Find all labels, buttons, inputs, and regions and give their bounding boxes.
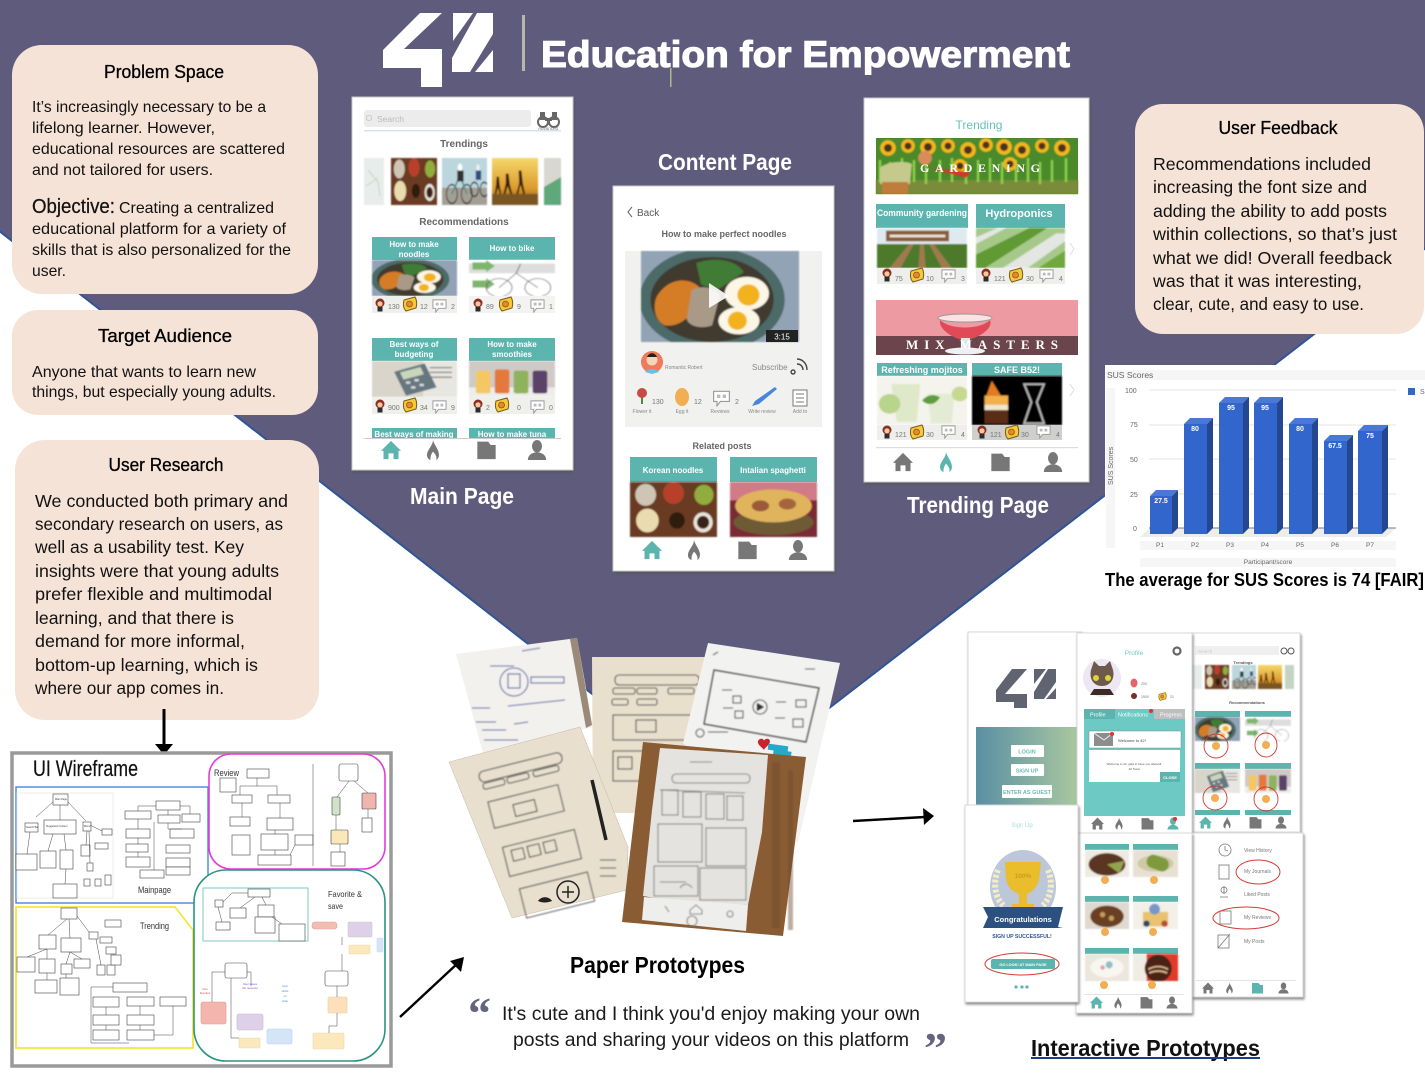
card: how to bike: How to bike [490, 244, 535, 253]
screen: sign up success [965, 805, 1078, 1002]
text: research findings: insights were that young adults [35, 561, 279, 581]
card: best ways of budgeting: budgeting [395, 350, 433, 359]
x axis labels: P1 [1156, 542, 1164, 549]
section: favorite and save: clicks [282, 989, 289, 993]
section: favorite and save: favorites [200, 991, 211, 995]
card: how to make smoothies: 2 [486, 405, 490, 412]
heading: related posts: Related posts [692, 441, 752, 451]
screen: landing: SIGN UP [1016, 768, 1039, 774]
bar values: 75 [1366, 433, 1374, 440]
screen: journals menu: My Journals [1244, 869, 1271, 875]
post title: How to make perfect noodles [661, 229, 787, 239]
bar values: 95 [1227, 405, 1235, 412]
card: how to make noodles [371, 237, 457, 313]
card row: partial cards [364, 428, 561, 439]
button with highlight: GO LOOK! AT MAIN PAGE [999, 963, 1047, 967]
bottom navigation icons [642, 540, 807, 560]
section: main page: Search Bar [26, 826, 39, 829]
screen: profile: Welcome to 42, glad to have you aboard! [1107, 762, 1161, 766]
card: how to make noodles: How to make [389, 240, 439, 249]
x axis labels: P5 [1296, 542, 1304, 549]
bar values: 80 [1296, 426, 1304, 433]
bar chart: SUS scores [1105, 365, 1425, 600]
section: favorite and save: the resource [242, 986, 258, 990]
x axis labels [1156, 542, 1374, 566]
video thumbnail [639, 248, 799, 351]
screen: trending with highlighted eggs: Search [1198, 649, 1213, 654]
quote text [502, 1003, 920, 1051]
card: how to make noodles: noodles [399, 250, 430, 259]
bottom navigation icons [381, 440, 546, 460]
section: favorite and save: User saves [243, 982, 258, 986]
card: community gardening: 3 [961, 276, 965, 283]
screen: profile [1077, 633, 1192, 833]
text: problem description: educational resources are scattered [32, 141, 285, 158]
text: feedback summary: within collections, so that’s just [1152, 224, 1397, 244]
card: community gardening [876, 204, 968, 284]
section: favorite and save: write [282, 999, 288, 1003]
screen: profile: -42 Team [1128, 767, 1141, 771]
text: audience description [32, 364, 276, 401]
card: how to bike: 89 [486, 304, 494, 311]
text: research findings: learning, and that there is [35, 608, 234, 628]
action icons: 12 [694, 399, 702, 406]
logo divider [522, 15, 525, 71]
card: refreshing mojitos: 30 [926, 432, 934, 439]
action icons: Write review [748, 409, 776, 415]
screen: profile: 200 [1141, 682, 1147, 686]
purple background chevron [0, 0, 1425, 793]
section: trending [16, 907, 193, 1048]
text: feedback summary [1152, 154, 1397, 314]
card: how to bike: 1 [549, 304, 553, 311]
panel: user feedback [1135, 104, 1424, 334]
label: trending page: Trending Page [907, 492, 1049, 518]
section: favorite and save: save [328, 901, 343, 911]
card: how to bike: 9 [517, 304, 521, 311]
text: feedback summary: what we did! Overall feedback [1152, 248, 1392, 268]
button with highlight [985, 953, 1059, 975]
action icons: 2 [735, 399, 739, 406]
section: favorite and save: User [202, 987, 208, 991]
text: audience description: Anyone that wants to learn new [32, 364, 256, 381]
screen: journals menu: My Reviews [1244, 915, 1271, 921]
card: how to make noodles: 12 [420, 304, 428, 311]
paper: trending sketch back [592, 657, 707, 813]
label: content page: Content Page [658, 149, 792, 175]
card: safe b52: 30 [1021, 432, 1029, 439]
text: objective: skills that is also personalized for the [32, 242, 291, 259]
screen: sign up success: Sign Up [1011, 823, 1033, 829]
screen: trending with highlighted eggs [1192, 633, 1300, 832]
text: feedback summary: increasing the font size and [1153, 177, 1367, 197]
screen: cake collection [1076, 833, 1192, 1013]
card: best ways of budgeting: Best ways of [390, 340, 439, 349]
text: research findings: bottom-up learning, which is [35, 655, 258, 675]
y axis: 75 [1130, 422, 1138, 429]
chevron [1070, 384, 1074, 396]
card: refreshing mojitos [877, 363, 968, 440]
heading: trending: Trending [956, 118, 1002, 132]
card: hydroponics: Hydroponics [985, 208, 1053, 220]
text: research findings: We conducted both primary and [35, 491, 288, 511]
text: objective: educational platform for a variety of [32, 221, 287, 238]
photo: pencil sketch on wood [622, 742, 806, 936]
action icons: 130 [652, 399, 664, 406]
screen: journals menu: My Posts [1244, 939, 1265, 945]
quote mark: opening: “ [468, 989, 491, 1038]
bottom navigation icons [1091, 817, 1178, 830]
panel: problem space [12, 45, 318, 294]
heading: target audience: Target Audience [98, 326, 232, 346]
text: feedback summary: adding the ability to add posts [1153, 201, 1387, 221]
screen: journals menu: View History [1244, 848, 1272, 854]
banner: mix masters: MIX MASTERS [906, 337, 1058, 352]
heading: user research: User Research [108, 455, 224, 475]
section: favorite and save: Favorite & [328, 889, 362, 899]
text: problem description: It’s increasingly necessary to be a [32, 99, 266, 116]
card: safe b52: 121 [990, 432, 1002, 439]
text: research findings: where our app comes in. [34, 678, 224, 698]
action icons: Flower it [633, 409, 652, 415]
bottom navigation icons [1199, 816, 1286, 828]
action icons: Egg it [676, 409, 689, 415]
y axis: 50 [1130, 457, 1138, 464]
heading: problem space: Problem Space [104, 62, 224, 82]
card: how to make noodles: 2 [451, 304, 455, 311]
gray content block [625, 251, 822, 427]
author row [641, 351, 807, 374]
paper: new journal sketch [456, 638, 593, 753]
author row: Romantic Robert [665, 365, 703, 371]
screen: profile: Profile [1090, 712, 1106, 718]
video thumbnail: 3:15 [774, 332, 790, 342]
trending thumbnails [364, 158, 561, 205]
card: refreshing mojitos: Refreshing mojitos [881, 365, 963, 375]
card: hydroponics: 30 [1026, 276, 1034, 283]
screen: landing: LOGIN [1018, 750, 1036, 756]
screen: trending with highlighted eggs: Recommendations [1229, 700, 1266, 705]
card: italian spaghetti: Intalian spaghetti [740, 466, 806, 475]
text: problem description: lifelong learner. However, [32, 120, 215, 137]
text: research findings [34, 491, 288, 698]
bottom navigation icons [876, 447, 1078, 472]
icon: binoculars: Advanced [538, 126, 559, 131]
screen: profile: Welcome to 42! [1118, 738, 1146, 743]
card: refreshing mojitos: 121 [895, 432, 907, 439]
paper prototypes collage [449, 638, 840, 936]
screen: sign up success: SIGN UP SUCCESSFUL! [992, 934, 1052, 940]
action icons: Reviews [711, 409, 730, 415]
text: feedback summary: Recommendations included [1153, 154, 1371, 174]
chevron [1070, 243, 1074, 255]
wireframe title: UI Wireframe [33, 756, 138, 781]
banner: mix masters [876, 300, 1078, 355]
arrow: paper to interactive prototypes [853, 808, 934, 825]
quote text: It's cute and I think you'd enjoy making your own [502, 1003, 920, 1025]
heading: user feedback: User Feedback [1218, 118, 1338, 138]
card: hydroponics: 121 [994, 276, 1006, 283]
card: best ways of budgeting: 34 [420, 405, 428, 412]
text: feedback summary: clear, cute, and easy to use. [1153, 294, 1364, 314]
screen: landing: ENTER AS GUEST [1003, 790, 1052, 796]
card: italian spaghetti [730, 457, 817, 537]
section: trending: Trending [140, 921, 169, 931]
quote text: posts and sharing your videos on this platform [513, 1029, 909, 1051]
gridlines and floor [1140, 390, 1396, 537]
icon: trophy badge: 100% [1015, 873, 1032, 880]
card: how to make smoothies: 0 [517, 405, 521, 412]
logo: 42 [383, 13, 493, 87]
section: main page: Main Page [55, 798, 68, 801]
text: problem description [32, 99, 285, 179]
bar values: 67.5 [1328, 443, 1342, 450]
phone: main page [352, 97, 573, 470]
card: how to bike [469, 237, 555, 313]
screen: trending with highlighted eggs: Trendings [1233, 660, 1253, 665]
card: korean noodles [630, 457, 717, 537]
back link [628, 207, 660, 219]
y axis: SUS Scores [1108, 446, 1115, 485]
section: main page: Menu [84, 825, 91, 828]
paper: trending sketch front [449, 727, 628, 918]
card row: partial cards: How to make tuna [478, 430, 547, 439]
back link: Back [637, 208, 660, 219]
card: community gardening: Community gardening [877, 208, 967, 218]
x axis labels: P6 [1331, 542, 1339, 549]
chart title: SUS Scores [1107, 370, 1153, 380]
card: community gardening: 75 [895, 276, 903, 283]
card: safe b52: SAFE B52! [994, 365, 1040, 375]
card: best ways of budgeting: 900 [388, 405, 400, 412]
search bar [364, 110, 561, 132]
interactive prototypes collage [965, 632, 1303, 1013]
icon: trophy badge [983, 850, 1063, 928]
heading: recommendations: Recommendations [419, 217, 509, 228]
legend: S [1420, 389, 1425, 396]
text: research findings: secondary research on users, as [35, 514, 283, 534]
panel: user research [15, 440, 319, 720]
card: korean noodles: Korean noodles [643, 466, 704, 475]
card: how to make smoothies [469, 338, 555, 414]
screen: profile: Profile [1125, 650, 1144, 657]
card row: partial cards: Best ways of making [374, 430, 454, 439]
legend [1408, 388, 1425, 396]
avatar: cat [1083, 659, 1121, 697]
section: main page [16, 787, 208, 903]
icon: trophy badge: Congratulations [994, 915, 1052, 924]
screen: profile: CLOSE [1163, 775, 1177, 780]
card: refreshing mojitos: 4 [961, 432, 965, 439]
section: main page: Mainpage [138, 885, 171, 895]
heading: trendings: Trendings [440, 139, 488, 150]
quote block [468, 989, 947, 1073]
x axis labels: P4 [1261, 542, 1269, 549]
screen: journals menu [1192, 833, 1303, 997]
y axis: 25 [1130, 492, 1138, 499]
card: hydroponics: 4 [1059, 276, 1063, 283]
phone: trending page [864, 98, 1089, 482]
section: review [209, 754, 385, 869]
card: safe b52 [972, 363, 1062, 440]
text: objective: Objective: [32, 196, 115, 218]
screen: journals menu: Liked Posts [1244, 892, 1270, 898]
card: safe b52: 4 [1056, 432, 1060, 439]
search bar: Search [377, 114, 404, 124]
text: feedback summary: was that it was interesting, [1152, 271, 1362, 291]
phone: content page [613, 186, 834, 571]
screen: profile: 1500 [1141, 695, 1149, 699]
section: favorite and save [194, 870, 385, 1061]
icon: binoculars [538, 112, 559, 131]
text: research findings: prefer flexible and multimodal [35, 584, 272, 604]
screen: profile: 21 [1170, 695, 1174, 699]
card: community gardening: 10 [926, 276, 934, 283]
action icons: Add to [793, 409, 807, 415]
x axis labels: P3 [1226, 542, 1234, 549]
section: main page: Suggested Content [46, 825, 68, 828]
y axis [1108, 388, 1138, 533]
card: how to make noodles: 130 [388, 304, 400, 311]
section: favorite and save: User [282, 984, 288, 988]
card: how to make smoothies: How to make [487, 340, 537, 349]
author row: Subscribe [752, 363, 788, 372]
card: best ways of budgeting [372, 338, 457, 414]
x axis labels: P2 [1191, 542, 1199, 549]
bar values: 95 [1261, 405, 1269, 412]
arrow: wireframe to paper prototypes [400, 957, 464, 1017]
text: objective [32, 196, 291, 280]
label: paper prototypes: Paper Prototypes [570, 952, 745, 978]
x axis labels: P7 [1366, 542, 1374, 549]
bar values [1154, 405, 1374, 505]
text: audience description: things, but especially young adults. [32, 384, 276, 401]
screen: landing [968, 632, 1082, 807]
text: objective: user. [32, 263, 66, 280]
section: favorite and save: on [283, 994, 287, 998]
quote mark: closing: ” [924, 1024, 947, 1073]
panel: UI wireframe [12, 753, 391, 1066]
y axis: 0 [1133, 526, 1137, 533]
text: objective: Creating a centralized [119, 200, 274, 217]
x axis labels: Participant/score [1244, 559, 1293, 566]
card: how to make smoothies: 0 [549, 405, 553, 412]
action icons [633, 387, 807, 415]
paper: step by step sketch [683, 643, 840, 843]
card: best ways of budgeting: 9 [451, 405, 455, 412]
arrow: research to wireframe [155, 709, 173, 755]
card: hydroponics [976, 204, 1065, 284]
bars [1150, 397, 1388, 534]
y axis: 100 [1125, 388, 1137, 395]
label: main page: Main Page [410, 483, 514, 509]
bar values: 27.5 [1154, 498, 1168, 505]
section: review: Review [214, 768, 239, 779]
banner: gardening [876, 138, 1078, 194]
bar values: 80 [1191, 426, 1199, 433]
text: problem description: and not tailored for users. [32, 162, 213, 179]
text: research findings: well as a usability test. Key [34, 537, 244, 557]
logo: gray 42 [996, 669, 1056, 708]
screen: profile: Progress [1160, 712, 1182, 718]
highlighted egg icons [1203, 733, 1278, 811]
panel: target audience [12, 310, 318, 415]
label: interactive prototypes: Interactive Prototypes [1031, 1035, 1260, 1061]
title: Education for Empowerment [541, 34, 1070, 75]
banner: gardening: GARDENING [920, 161, 1040, 175]
card: how to make smoothies: smoothies [492, 350, 533, 359]
screen: profile: Notifications [1118, 712, 1148, 718]
text: research findings: demand for more informal, [35, 631, 245, 651]
